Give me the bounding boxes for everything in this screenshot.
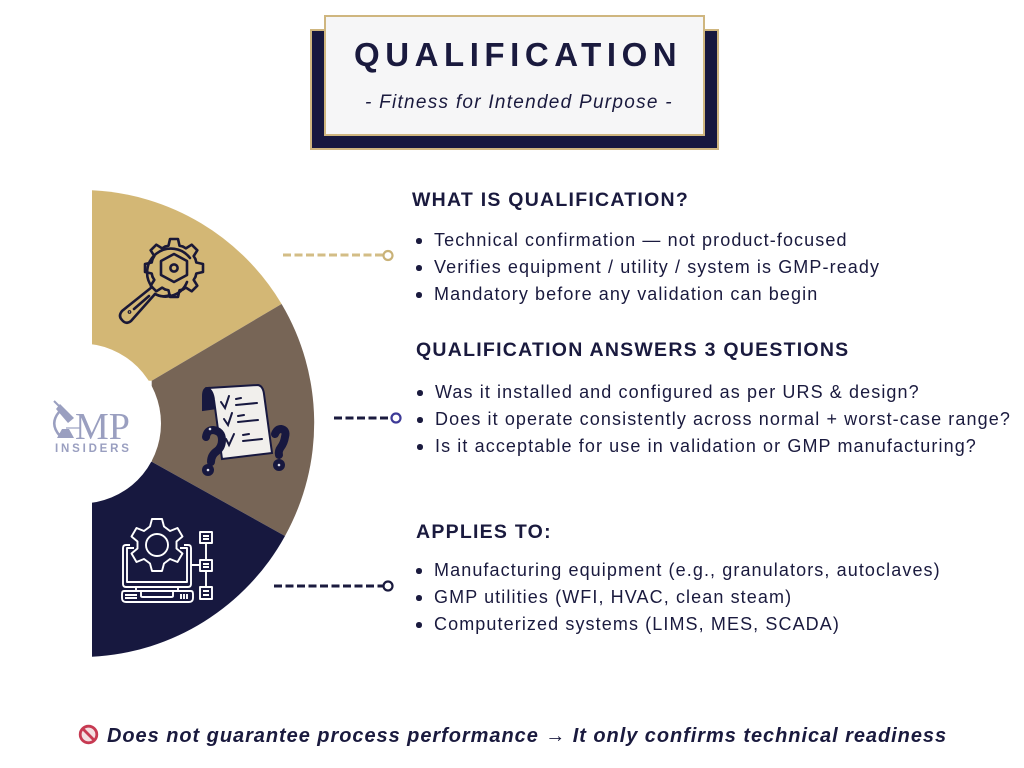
bullet list: Is it acceptable for use in validation or GMP manufacturing? — [435, 436, 977, 456]
bullet list: GMP utilities (WFI, HVAC, clean steam) — [434, 587, 792, 607]
bullet list: Mandatory before any validation can begin — [434, 284, 818, 304]
connector: purple — [334, 414, 400, 422]
icon: laptop, gear and flow boxes — [122, 519, 212, 602]
title banner — [310, 15, 719, 150]
connector: navy — [274, 582, 392, 590]
section: applies to — [416, 521, 941, 634]
banner navy backing — [310, 29, 719, 150]
footer note — [78, 724, 947, 747]
title: QUALIFICATION — [354, 36, 682, 73]
icon: checklist with question marks — [202, 385, 286, 476]
white centre circle — [1, 344, 161, 504]
subtitle: - Fitness for Intended Purpose - — [365, 92, 673, 113]
bullet list: Manufacturing equipment (e.g., granulators, autoclaves) — [434, 560, 941, 580]
bullet list: Was it installed and configured as per URS & design? — [435, 382, 920, 402]
banner light panel — [324, 15, 705, 136]
heading: APPLIES TO: — [416, 521, 552, 543]
segmented semicircle graphic — [92, 190, 402, 657]
section: what is qualification — [412, 189, 880, 304]
heading: QUALIFICATION ANSWERS 3 QUESTIONS — [416, 339, 849, 361]
segment: tan — [92, 190, 282, 381]
bullet list — [417, 382, 1011, 456]
bullet list — [416, 230, 880, 304]
bullet list: Verifies equipment / utility / system is GMP-ready — [434, 257, 880, 277]
icon: gear and wrench — [120, 239, 203, 323]
heading: WHAT IS QUALIFICATION? — [412, 189, 689, 211]
footer text: Does not guarantee process performance → It only confirms technical readiness — [107, 725, 947, 747]
connector: tan — [283, 251, 392, 260]
logo: GMP Insiders — [52, 400, 132, 455]
icon: prohibited sign — [78, 724, 98, 744]
bullet list: Technical confirmation — not product-focused — [434, 230, 848, 250]
segment: brown — [152, 304, 314, 536]
logo MP letters: MP — [75, 406, 130, 448]
bullet list: Computerized systems (LIMS, MES, SCADA) — [434, 614, 840, 634]
logo mark — [52, 400, 80, 438]
bullet list: Does it operate consistently across normal + worst-case range? — [435, 409, 1011, 429]
logo word INSIDERS: INSIDERS — [55, 443, 132, 455]
section: qualification answers 3 questions — [416, 339, 1011, 456]
bullet list — [416, 560, 941, 634]
segment: navy — [92, 460, 285, 657]
